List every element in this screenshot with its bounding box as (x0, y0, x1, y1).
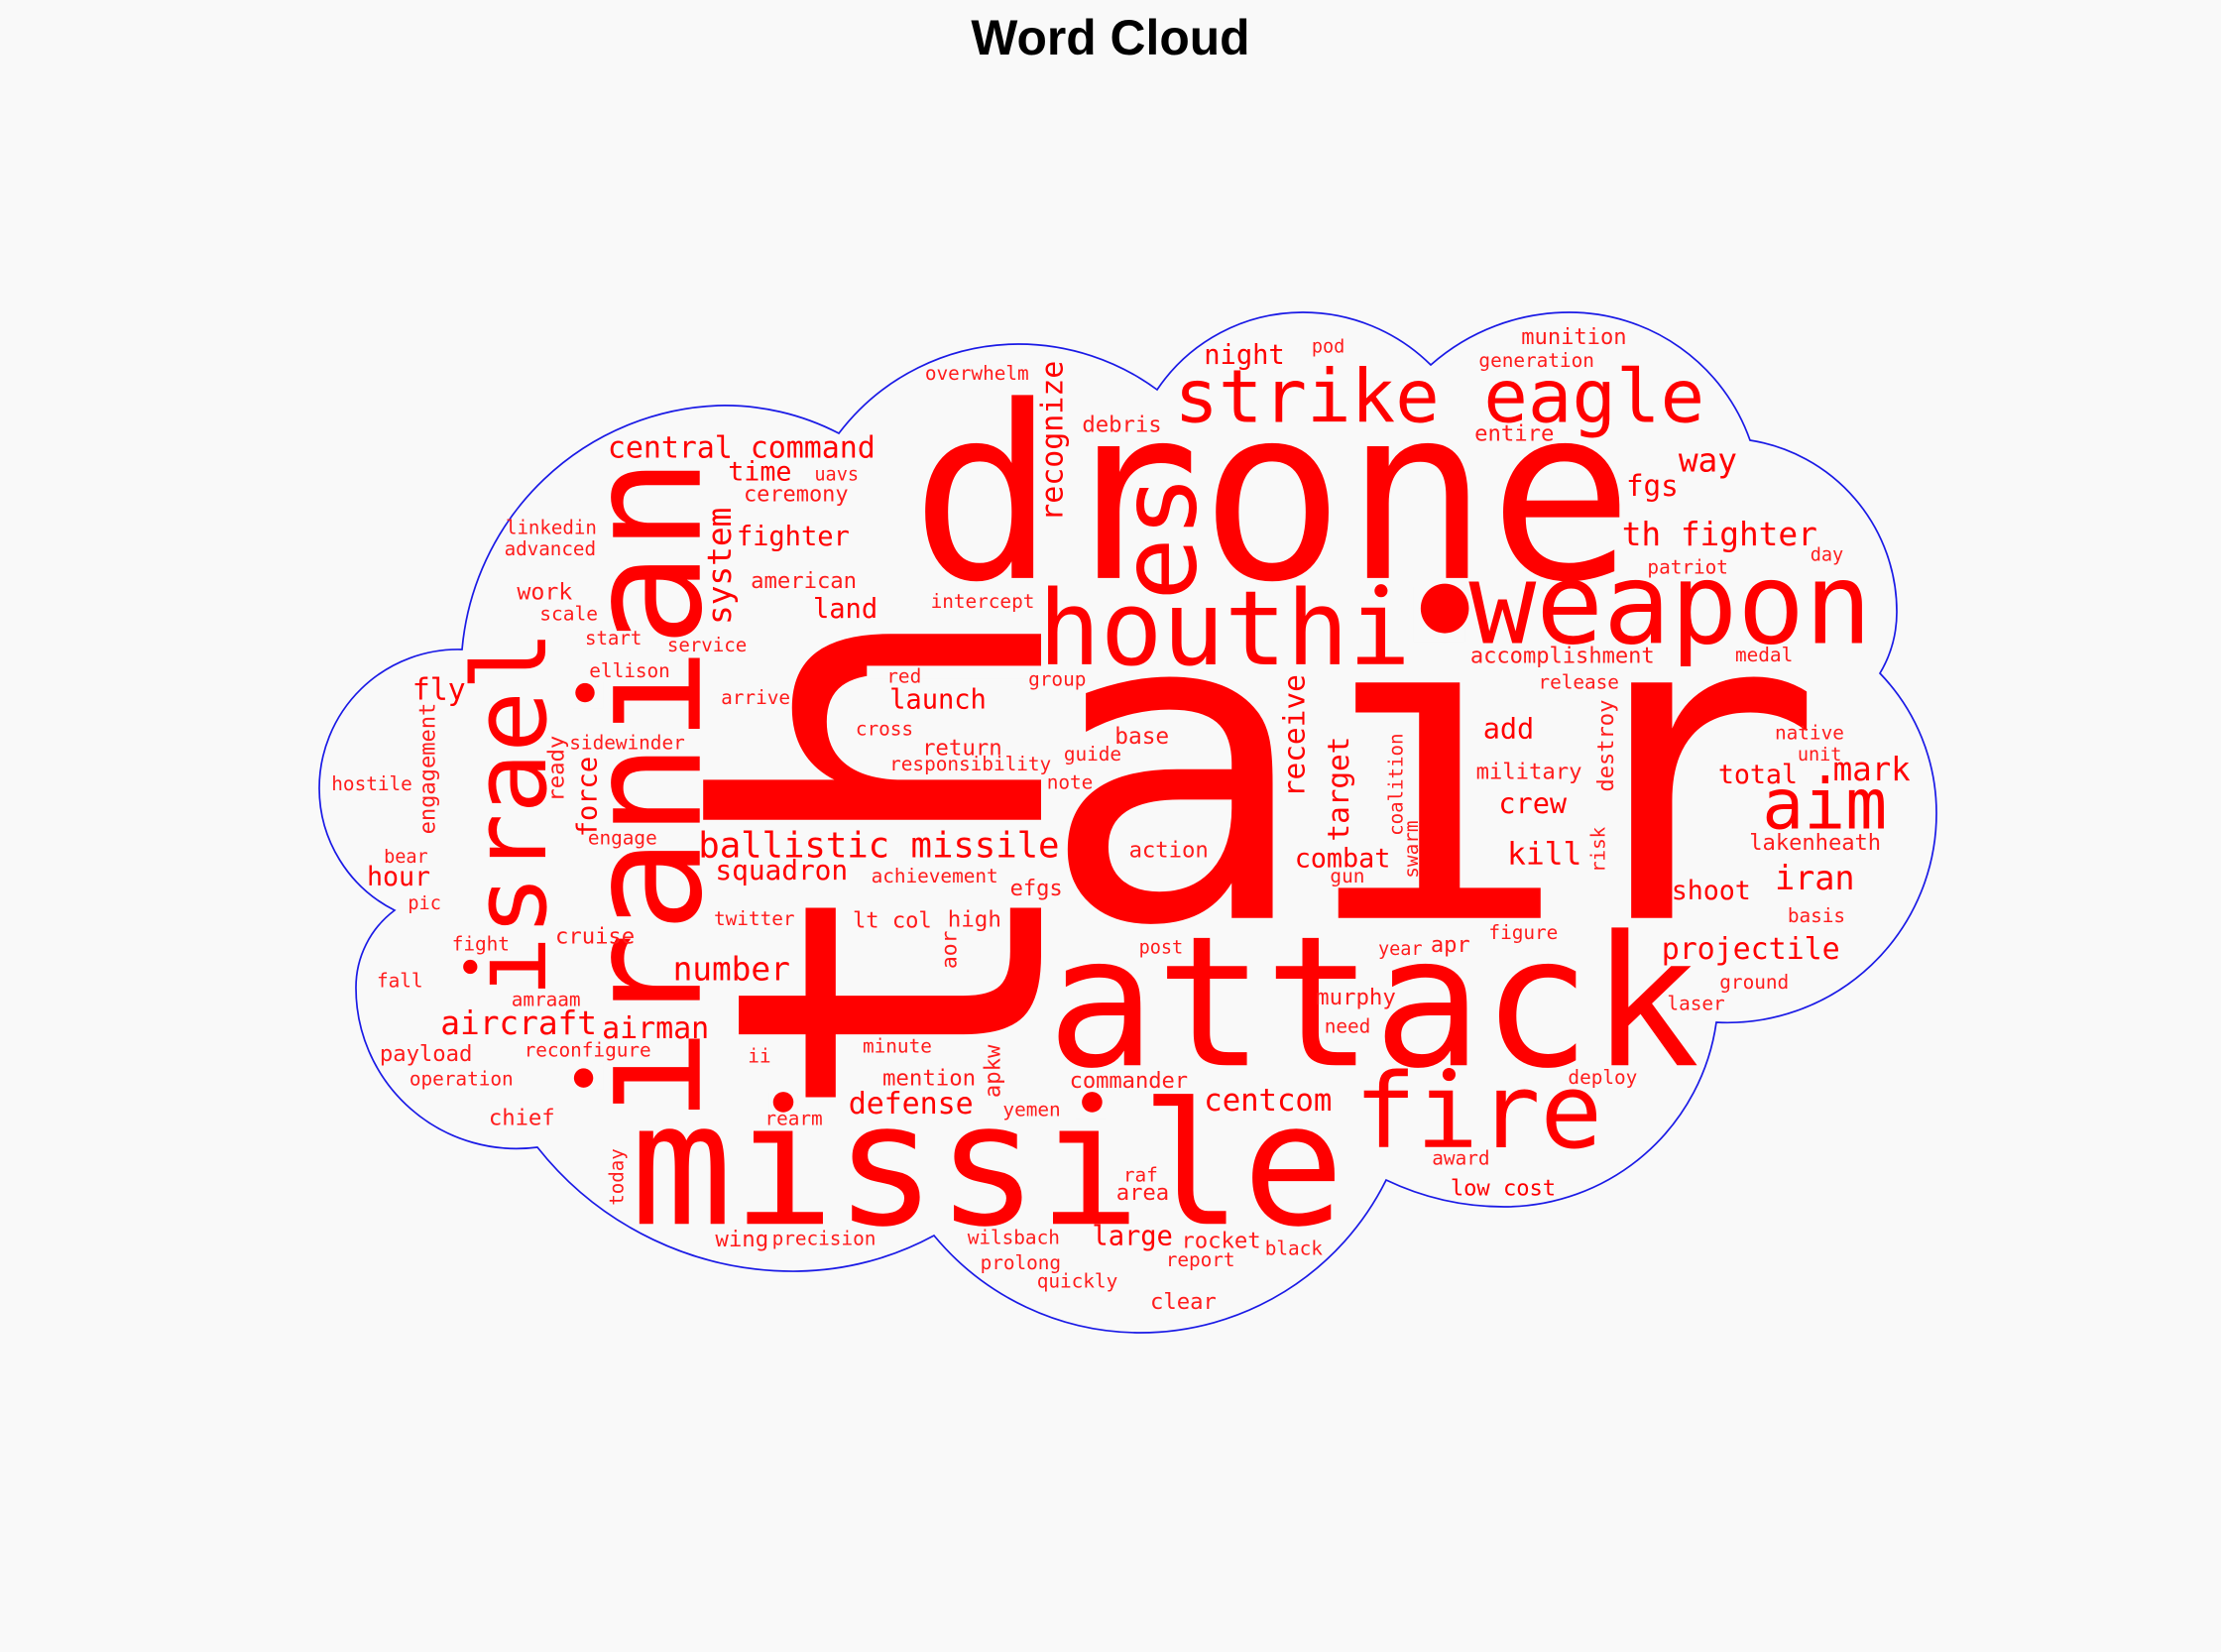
small words: pic (408, 893, 441, 914)
small words: american (751, 568, 857, 594)
small words: area (1116, 1180, 1169, 1206)
small words: clear (1150, 1289, 1217, 1315)
small words: uavs (814, 464, 859, 485)
small words: destroy (1593, 700, 1619, 792)
medium words: recognize (1035, 361, 1070, 522)
medium words (367, 340, 1911, 1252)
word: air: air (1038, 519, 1823, 1020)
small words: group (1028, 667, 1086, 690)
small words: guide (1064, 743, 1121, 766)
small words: murphy (1316, 985, 1396, 1010)
small words: post (1139, 937, 1183, 958)
small words: linkedin (506, 517, 597, 539)
small words: coalition (1384, 734, 1407, 836)
small words: award (1432, 1146, 1490, 1169)
medium words: number (673, 951, 790, 989)
small words: swarm (1400, 820, 1423, 879)
small words: service (667, 634, 747, 656)
small words: intercept (931, 590, 1034, 613)
medium words: system (701, 508, 739, 625)
small words: wilsbach (968, 1226, 1060, 1248)
small words: sidewinder (569, 732, 685, 755)
small words: aor (937, 930, 962, 969)
small words: release (1538, 670, 1619, 693)
word: aim: aim (1762, 765, 1887, 846)
medium words: fly (412, 673, 466, 708)
small words: responsibility (889, 753, 1051, 775)
small words: apr (1431, 932, 1470, 958)
word th: arch trim (867, 665, 1041, 678)
small words: prolong (981, 1251, 1061, 1274)
small words: amraam (512, 988, 581, 1010)
small words: commander (1070, 1068, 1188, 1094)
medium words: large (1092, 1222, 1173, 1252)
small words: mention (882, 1065, 976, 1091)
small words: cross (856, 717, 913, 740)
small words: risk (1587, 826, 1610, 873)
medium words: crew (1498, 786, 1568, 820)
medium words: time (728, 456, 791, 487)
small words: reconfigure (525, 1039, 651, 1062)
word houthi: round i dot (1372, 582, 1391, 601)
small words: laser (1667, 993, 1725, 1015)
small words: overwhelm (925, 362, 1029, 385)
small words: minute (863, 1034, 932, 1057)
small words: figure (1488, 921, 1558, 944)
small words: rearm (764, 1107, 823, 1129)
small words: base (1114, 724, 1169, 750)
word israel: round i dot (463, 956, 485, 978)
small words: fight (452, 933, 510, 956)
small words: ready (544, 736, 570, 802)
medium words: target (1322, 737, 1355, 842)
small words: lt col (853, 908, 932, 934)
small words: patriot (1647, 556, 1728, 579)
small words: fall (377, 970, 423, 993)
word air: round i dot (1414, 584, 1468, 642)
small words: yemen (1002, 1099, 1061, 1121)
word: drone: drone (911, 356, 1633, 636)
small words: chief (489, 1105, 555, 1130)
small words: rocket (1181, 1229, 1261, 1254)
small words: medal (1735, 644, 1793, 666)
medium words: add (1483, 711, 1534, 745)
small words: debris (1082, 413, 1162, 438)
small words: efgs (1010, 876, 1063, 901)
medium words: shoot (1672, 876, 1751, 906)
medium words: receive (1278, 674, 1312, 797)
medium words: iran (1775, 859, 1855, 897)
word iranian: round i dots (572, 681, 604, 1090)
small words: engagement (415, 703, 441, 834)
small words: raf (1123, 1163, 1158, 1186)
cloud outline (319, 312, 1936, 1333)
small words: bear (384, 847, 428, 868)
small words: wing (715, 1227, 768, 1252)
medium words: fighter (737, 522, 850, 552)
small words: deploy (1568, 1066, 1637, 1089)
medium words: kill (1507, 836, 1581, 872)
small words: lakenheath (1749, 830, 1881, 856)
small words: day (1811, 545, 1843, 566)
medium words: centcom (1204, 1083, 1332, 1119)
small words (331, 324, 1881, 1315)
small words: advanced (505, 537, 596, 560)
word: houthi: houthi (1038, 568, 1411, 689)
small words: native (1775, 722, 1844, 745)
word: ballistic missile: ballistic missile (698, 825, 1059, 866)
medium words: aircraft (440, 1004, 597, 1042)
medium words: mark (1833, 751, 1911, 788)
small words: high (948, 906, 1001, 932)
medium words: launch (889, 684, 987, 715)
small words: red (886, 665, 921, 688)
medium words: projectile (1662, 932, 1840, 967)
medium words: airman (602, 1011, 709, 1046)
small words: generation (1478, 349, 1594, 372)
medium words: total (1718, 760, 1798, 790)
medium words: combat (1295, 843, 1390, 874)
word: th: th (629, 595, 1146, 1124)
word: missile: missile (631, 1067, 1344, 1264)
small words: scale (539, 603, 598, 626)
medium words: central command (608, 430, 876, 465)
small words: ground (1719, 971, 1789, 994)
medium words: hour (367, 862, 430, 892)
word: fire: fire (1354, 1051, 1602, 1172)
small words: military (1476, 760, 1581, 785)
small words: payload (380, 1041, 472, 1067)
title: Word Cloud (971, 10, 1250, 65)
small words: gun (1330, 865, 1364, 887)
word: strike eagle: strike eagle (1174, 354, 1704, 440)
small words: work (517, 578, 572, 605)
small words: hostile (331, 772, 412, 795)
medium words: fgs (1626, 469, 1679, 503)
small words: black (1265, 1238, 1323, 1260)
word: weapon: weapon (1468, 539, 1872, 670)
small words: munition (1521, 324, 1627, 350)
small words: twitter (714, 907, 795, 930)
word: attack: attack (1047, 897, 1699, 1109)
small words: accomplishment (1470, 644, 1655, 669)
medium words: way (1679, 442, 1737, 480)
medium words: night (1204, 340, 1285, 371)
small words: year (1378, 939, 1423, 960)
small words: ellison (589, 659, 670, 682)
small words: start (585, 627, 642, 649)
small words: precision (772, 1228, 876, 1250)
small words: ceremony (744, 483, 849, 508)
medium words: th fighter (1622, 516, 1817, 553)
word: israel: israel (452, 630, 570, 998)
small words: basis (1788, 904, 1845, 927)
word missile: round i dots (769, 1092, 1107, 1120)
small words: need (1325, 1014, 1370, 1037)
small words: operation (409, 1067, 514, 1090)
word: es: es (1099, 475, 1221, 601)
small words: apkw (981, 1044, 1006, 1098)
small words: engage (588, 826, 657, 849)
small words: action (1129, 837, 1209, 863)
small words: report (1166, 1248, 1235, 1271)
medium words: land (813, 594, 877, 625)
word: iranian: iranian (552, 457, 738, 1123)
small words: return (922, 735, 1002, 761)
small words: unit (1798, 745, 1841, 766)
word fire: round i dot (1438, 1068, 1459, 1084)
small words: quickly (1037, 1270, 1117, 1293)
medium words: defense (849, 1087, 974, 1121)
small words: pod (1312, 337, 1344, 358)
medium words: force (572, 757, 603, 837)
medium words: squadron (715, 854, 848, 886)
small words: today (606, 1148, 629, 1206)
small words: arrive (721, 686, 790, 709)
small words: ii (748, 1044, 771, 1067)
small words: note (1047, 771, 1093, 794)
small words: achievement (872, 865, 998, 887)
small words: entire (1474, 420, 1554, 446)
word cloud words (331, 324, 1911, 1315)
medium words: low cost (1451, 1176, 1556, 1202)
small words: cruise (555, 923, 635, 949)
